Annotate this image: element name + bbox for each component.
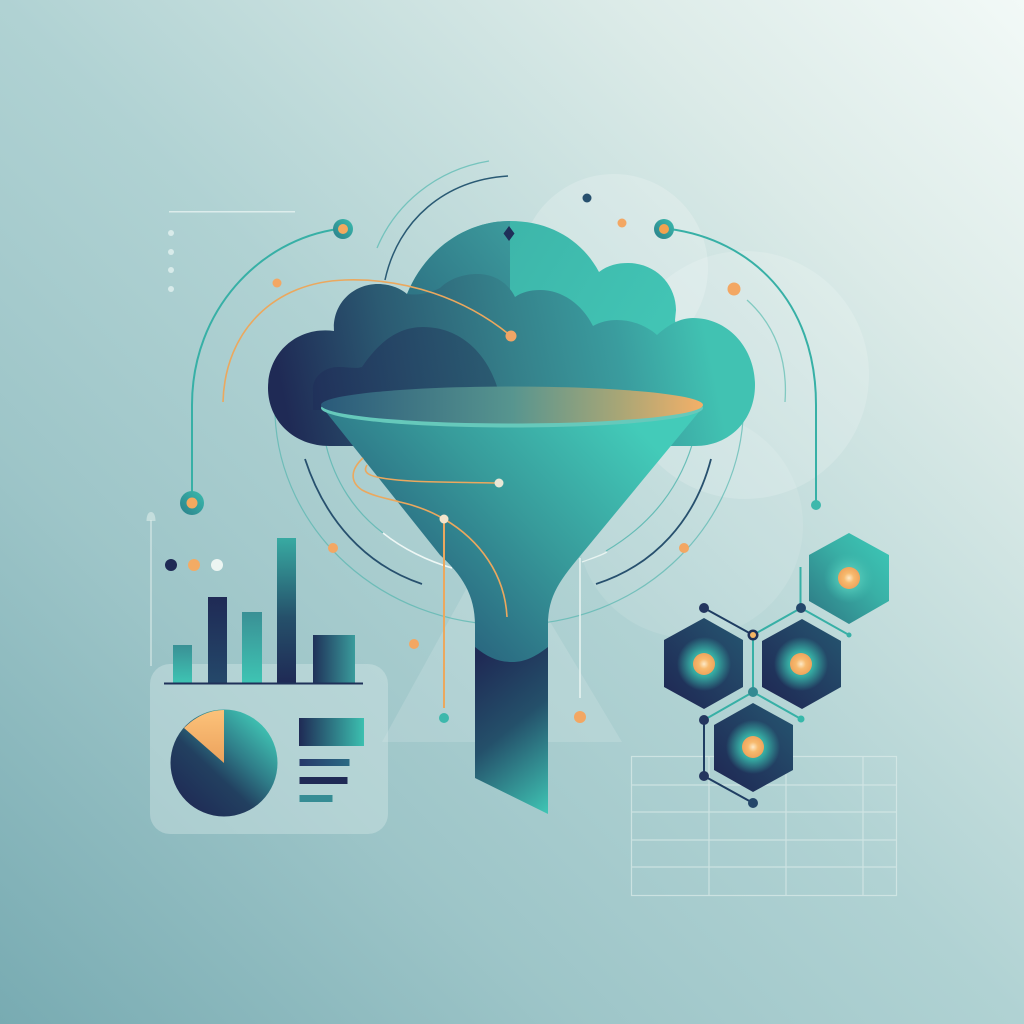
scattered dots <box>328 194 740 723</box>
hexagon network <box>664 533 889 808</box>
node top left <box>333 219 353 239</box>
concentric arcs around funnel <box>275 415 743 625</box>
decorative background circles <box>382 174 869 742</box>
pie chart <box>170 710 278 816</box>
left teal connector <box>180 219 353 515</box>
network lines <box>704 567 849 803</box>
diamond marker on cloud <box>504 226 514 241</box>
chart legend dots <box>165 559 223 571</box>
legend bars <box>299 718 364 802</box>
funnel flow nodes <box>439 478 504 723</box>
node top right <box>654 219 674 239</box>
hexagon bottom <box>714 703 793 792</box>
chart axis arrow <box>146 512 156 666</box>
cloud back layer <box>407 221 690 400</box>
funnel spout <box>475 630 548 814</box>
right faint arc <box>747 300 785 402</box>
cloud <box>268 221 755 446</box>
network nodes <box>699 603 852 808</box>
orange flow lines on funnel <box>353 458 507 708</box>
grid table <box>632 756 897 896</box>
bar chart <box>164 538 363 684</box>
funnel rim <box>321 386 703 428</box>
funnel cone <box>322 407 703 662</box>
node bottom left <box>180 491 204 515</box>
hexagon left <box>664 618 743 709</box>
cloud front layer <box>268 274 755 446</box>
vertical line lower right of spout <box>579 558 581 698</box>
orange arc over cloud <box>223 278 516 402</box>
cloud dark lobes <box>313 327 498 410</box>
dashboard panel <box>150 664 388 834</box>
hexagon right <box>762 619 841 709</box>
hexagon teal <box>809 533 889 624</box>
top-left header line and dots <box>168 211 295 292</box>
dome shaded half <box>407 221 510 320</box>
right teal connector <box>654 219 821 510</box>
upper arcs above cloud <box>377 161 508 280</box>
